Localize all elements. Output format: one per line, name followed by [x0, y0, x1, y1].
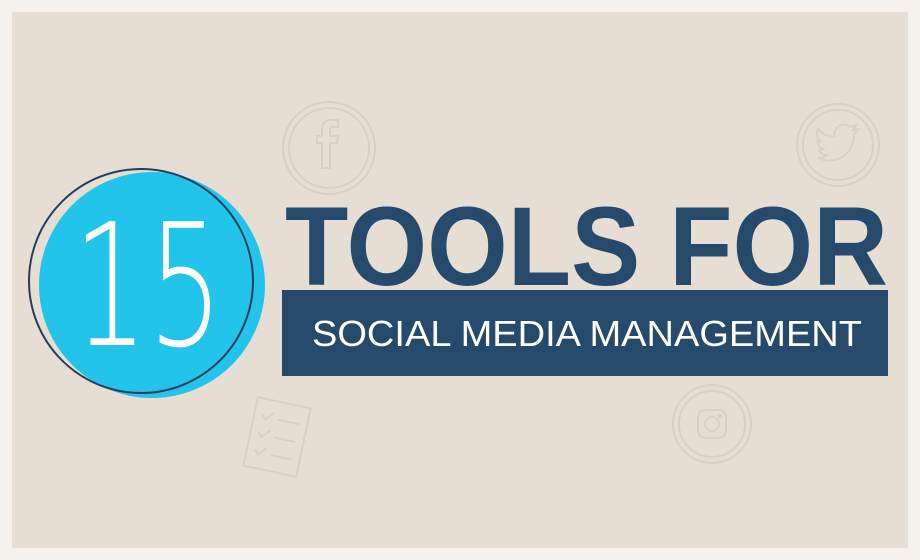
icon: checklist document — [243, 397, 311, 477]
title: TOOLS FOR: TOOLS FOR — [285, 184, 888, 309]
number badge: 15 — [73, 188, 223, 386]
icon: instagram — [673, 385, 751, 463]
subtitle banner — [282, 290, 888, 376]
icon: facebook — [283, 102, 375, 194]
subtitle banner: SOCIAL MEDIA MANAGEMENT — [312, 313, 862, 354]
number badge — [29, 169, 265, 398]
icon: twitter — [797, 104, 879, 186]
